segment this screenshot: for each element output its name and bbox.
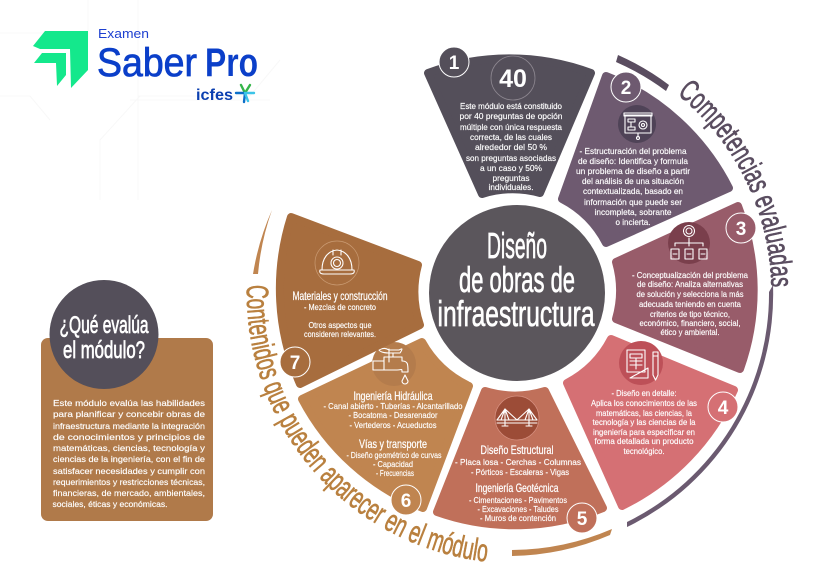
text block: alrededor del 50 % <box>475 142 547 152</box>
number 3 <box>726 213 756 243</box>
curved heading: contenidos que pueden aparecer en el módulo: Contenidos que pueden aparecer en el módulo <box>246 286 488 562</box>
text block: - Muros de contención <box>480 513 556 523</box>
text block: - Diseño geométrico de curvas <box>346 450 442 460</box>
text block: Este módulo está constituido <box>460 101 562 111</box>
number 6 <box>391 485 421 515</box>
text block: de solución y selecciona la más <box>636 289 744 299</box>
text block: por 40 preguntas de opción <box>460 111 563 121</box>
text block: ético y ambiental. <box>660 327 720 337</box>
segment shape <box>428 58 591 194</box>
heading <box>60 312 149 364</box>
number 7: 7 <box>290 353 300 374</box>
number 7 <box>280 347 310 377</box>
text block: consideren relevantes. <box>304 329 376 339</box>
text block: - Cimentaciones - Pavimentos <box>469 495 567 505</box>
segment shape <box>562 76 729 243</box>
text block: preguntas <box>492 173 530 183</box>
panel 6: ingeniería hidráulica <box>302 342 469 515</box>
text block: - Capacidad <box>373 459 413 469</box>
logo text: Examen: Examen <box>98 26 149 41</box>
text block: Ingeniería Geotécnica <box>476 481 559 495</box>
text block: ingeniería para especificar en <box>593 427 695 437</box>
text block <box>324 389 463 478</box>
text block: Otros aspectos que <box>308 320 372 330</box>
text block: criterios de tipo técnico, <box>650 309 730 319</box>
panel 2: estructuración <box>562 72 729 243</box>
body text: Este módulo evalúa las habilidades <box>53 398 205 408</box>
logo text: Saber: Saber <box>97 41 197 85</box>
number 6: 6 <box>401 491 411 512</box>
icon: presentation board <box>618 105 656 143</box>
number 2: 2 <box>621 78 631 99</box>
number 2 <box>611 72 641 102</box>
text block: Materiales y construcción <box>292 289 388 303</box>
text block: un problema de diseño a partir <box>576 166 690 176</box>
icon: 40 <box>491 56 535 100</box>
curved heading: competencias evaluadas: Competencias evaluadas <box>680 80 793 287</box>
text block: - Mezclas de concreto <box>304 302 376 312</box>
text block: tecnología y las ciencias de la <box>592 417 696 427</box>
logo: Examen Saber Pro icfes <box>33 26 258 104</box>
text block: Ingeniería Hidráulica <box>354 389 433 403</box>
text block: o incierta. <box>616 217 650 227</box>
segment shape <box>567 339 734 506</box>
text block <box>632 270 748 337</box>
text block: son preguntas asociadas <box>466 153 556 163</box>
body text: infraestructura mediante la integración <box>53 421 205 431</box>
number 4 <box>708 392 738 422</box>
central title circle <box>429 205 605 381</box>
text block: a un caso y 50% <box>480 163 542 173</box>
arc: orange bottom stroke <box>512 529 612 556</box>
text block: - Diseño en detalle: <box>612 388 676 398</box>
panel 5: diseño estructural <box>437 391 603 533</box>
icon: plan and pencil <box>619 341 663 385</box>
body text: financieras, de mercado, ambientales, <box>53 488 205 498</box>
text block <box>455 443 581 523</box>
body text: requerimientos y restricciones técnicas, <box>53 477 205 487</box>
number 5 <box>567 503 597 533</box>
panel: qué evalúa el módulo <box>41 280 213 521</box>
text block <box>460 101 563 192</box>
text block: del análisis de una situación <box>582 176 684 186</box>
text block: - Pórticos - Escaleras - Vigas <box>471 467 569 477</box>
title: Diseño <box>487 225 547 266</box>
panel background <box>41 338 213 521</box>
text block: individuales. <box>488 182 534 192</box>
text block: - Frecuencias <box>376 468 414 478</box>
heading: ¿Qué evalúa <box>60 312 149 339</box>
text block: - Vertederos - Acueductos <box>350 420 436 430</box>
icon: helmet <box>315 241 359 285</box>
text block: forma detallada un producto <box>594 436 694 446</box>
segment shape <box>280 217 420 384</box>
text block: de diseño: Identifica y formula <box>578 156 688 166</box>
title <box>438 225 595 334</box>
panel 7: materiales y construcción <box>280 217 420 384</box>
segment shape <box>437 391 603 525</box>
text block: tecnológico. <box>624 446 664 456</box>
text block: - Canal abierto - Tuberías - Alcantarillado <box>324 401 463 411</box>
text block: - Estructuración del problema <box>580 146 687 156</box>
number 1 <box>439 47 469 77</box>
body text: sociales, éticas y económicas. <box>52 499 168 509</box>
logo text: icfes: icfes <box>196 87 233 104</box>
number 3: 3 <box>736 219 746 240</box>
arc: purple upper stroke <box>616 55 669 91</box>
icon: gear and tree <box>668 222 710 264</box>
arc: orange upper stroke <box>253 210 272 274</box>
text block: incompleta, sobrante <box>594 207 672 217</box>
body text <box>52 398 206 509</box>
heading: el módulo? <box>63 337 145 364</box>
text block: múltiple con única respuesta <box>460 122 562 132</box>
text block: Aplica los conocimientos de las <box>591 398 697 408</box>
number 5: 5 <box>577 509 588 530</box>
icon: green arrows <box>33 31 88 88</box>
text block: - Bocatoma - Desarenador <box>348 410 438 420</box>
text block: contextualizada, basado en <box>583 186 683 196</box>
text block: - Conceptualización del problema <box>632 270 748 280</box>
text block: económico, financiero, social, <box>640 318 740 328</box>
heading circle <box>50 280 158 389</box>
panel 4: diseño en detalle <box>567 339 738 506</box>
text block: - Placa losa - Cerchas - Columnas <box>455 457 581 467</box>
arc: purple lower stroke <box>627 285 773 527</box>
icon: 40: 40 <box>499 65 527 93</box>
body text: satisfacer necesidades y cumplir con <box>53 466 205 476</box>
panel 3: conceptualización <box>616 206 756 369</box>
body text: para planificar y concebir obras de <box>53 409 205 419</box>
text block: matemáticas, las ciencias, la <box>596 408 692 418</box>
title: de obras de <box>459 259 575 300</box>
text block: de diseño: Analiza alternativas <box>637 279 743 289</box>
panel 1: preguntas <box>428 47 591 194</box>
text block: Diseño Estructural <box>480 443 554 457</box>
number 1: 1 <box>449 53 460 74</box>
text block: Vías y transporte <box>359 437 427 451</box>
text block: adecuada teniendo en cuenta <box>639 299 741 309</box>
logo text: Pro: Pro <box>205 41 258 85</box>
body text: matemáticas, ciencias, tecnología y <box>53 443 206 453</box>
title: infraestructura <box>438 293 595 334</box>
text block: información que puede ser <box>584 197 682 207</box>
text block: - Excavaciones - Taludes <box>478 504 558 514</box>
icon: icfes star <box>236 85 254 102</box>
segment shape <box>302 342 469 508</box>
body text: de conocimientos y principios de <box>53 432 205 442</box>
text block <box>576 146 690 227</box>
text block <box>292 289 388 339</box>
number 4: 4 <box>718 398 729 419</box>
icon: bridge <box>495 396 539 440</box>
text block: correcta, de las cuales <box>470 132 552 142</box>
text block <box>591 388 697 456</box>
body text: ciencias de la ingeniería, con el fin de <box>53 454 205 464</box>
segment shape <box>616 206 754 369</box>
icon: faucet <box>372 342 416 386</box>
